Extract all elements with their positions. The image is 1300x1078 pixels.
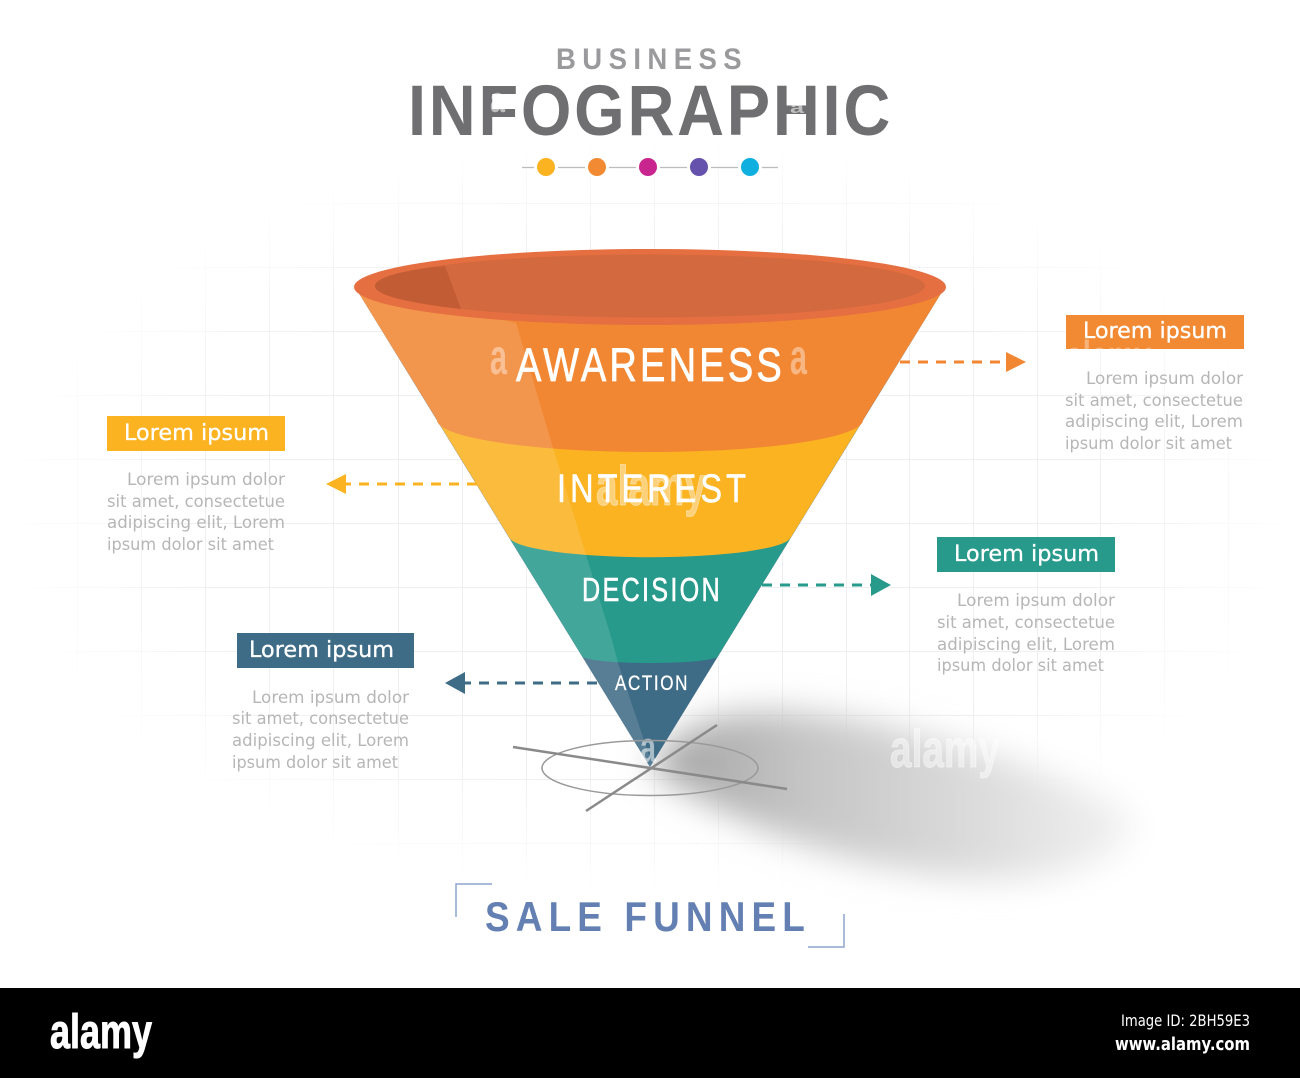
callout body text: ipsum dolor sit amet (1065, 434, 1232, 454)
watermark marks on title: a (790, 100, 804, 117)
logo: alamy: alamy (50, 1006, 152, 1059)
callout header: Lorem ipsum (954, 542, 1099, 567)
main title: INFOGRAPHIC: INFOGRAPHIC (408, 72, 893, 151)
funnel inner opening (375, 254, 925, 318)
image id: Image ID: 2BH59E3 (1121, 1011, 1250, 1030)
callout body text: adipiscing elit, Lorem (937, 635, 1115, 655)
callout body text: sit amet, consectetue (232, 709, 409, 729)
callout body text: Lorem ipsum dolor (957, 591, 1115, 611)
arrow: decision to right callout (762, 574, 891, 596)
callout body text: adipiscing elit, Lorem (232, 731, 409, 751)
callout body text: ipsum dolor sit amet (937, 656, 1104, 676)
callout: awareness (orange) (1065, 315, 1244, 454)
funnel band: action (355, 287, 945, 767)
callout header (937, 537, 1115, 572)
callout body text (107, 470, 285, 555)
colored dots row (522, 155, 778, 179)
callout body text (937, 591, 1115, 676)
inner opening shadow (375, 266, 461, 309)
callout header: Lorem ipsum (124, 421, 269, 446)
funnel (340, 249, 946, 780)
callout header (237, 633, 414, 668)
callout body text (232, 688, 409, 773)
watermark marks on title (490, 79, 804, 120)
funnel band: interest (437, 420, 863, 557)
site url: www.alamy.com (1115, 1034, 1250, 1055)
funnel base sketch: ellipse and crossed lines (513, 725, 787, 811)
callout body text: Lorem ipsum dolor (127, 470, 285, 490)
footer heading: SALE FUNNEL with brackets: SALE FUNNEL (485, 893, 811, 940)
callout header: Lorem ipsum (249, 638, 394, 663)
watermark marks on funnel: a (640, 723, 656, 772)
watermark marks on funnel: a (490, 329, 508, 385)
eyebrow: BUSINESS: BUSINESS (556, 43, 748, 76)
callout body text: Lorem ipsum dolor (252, 688, 409, 708)
watermark marks on funnel: a (790, 329, 808, 385)
callout body text: sit amet, consectetue (937, 613, 1115, 633)
callout body text: Lorem ipsum dolor (1086, 369, 1243, 389)
callout body text: adipiscing elit, Lorem (107, 513, 285, 533)
callout body text (1065, 369, 1243, 454)
funnel band: decision (510, 538, 790, 663)
callout body text: ipsum dolor sit amet (232, 753, 398, 773)
arrow: interest to left callout (326, 474, 477, 494)
label: INTEREST: INTEREST (557, 467, 750, 511)
arrow: awareness to right callout (900, 352, 1026, 372)
funnel left highlight (360, 294, 652, 766)
funnel cast shadow: alamy (890, 720, 1000, 779)
watermark marks on funnel (490, 329, 808, 772)
label: AWARENESS: AWARENESS (516, 338, 785, 391)
arrow: action to left callout (445, 672, 597, 694)
footer heading: SALE FUNNEL with brackets (456, 884, 844, 947)
callout header (107, 416, 285, 451)
label: DECISION: DECISION (582, 571, 722, 608)
callout body text: sit amet, consectetue (107, 492, 285, 512)
black watermark bar (0, 988, 1300, 1078)
callout header: alamy (1066, 332, 1151, 381)
callout body text: sit amet, consectetue (1065, 391, 1243, 411)
funnel rim (354, 249, 946, 325)
funnel cast shadow (650, 711, 1131, 879)
callout body text: adipiscing elit, Lorem (1065, 412, 1243, 432)
funnel band: awareness (355, 287, 945, 452)
callout: decision (teal) (937, 537, 1115, 676)
callout: action (blue) (232, 633, 414, 773)
title: Business Infographic (408, 43, 893, 151)
callout: interest (yellow) (107, 416, 285, 555)
watermark marks on title: a (490, 79, 506, 120)
watermark marks on funnel: alamy (596, 454, 706, 517)
callout body text: ipsum dolor sit amet (107, 535, 274, 555)
callout header: Lorem ipsum (1083, 319, 1227, 344)
callout header (1066, 315, 1244, 349)
label: ACTION: ACTION (615, 672, 689, 695)
